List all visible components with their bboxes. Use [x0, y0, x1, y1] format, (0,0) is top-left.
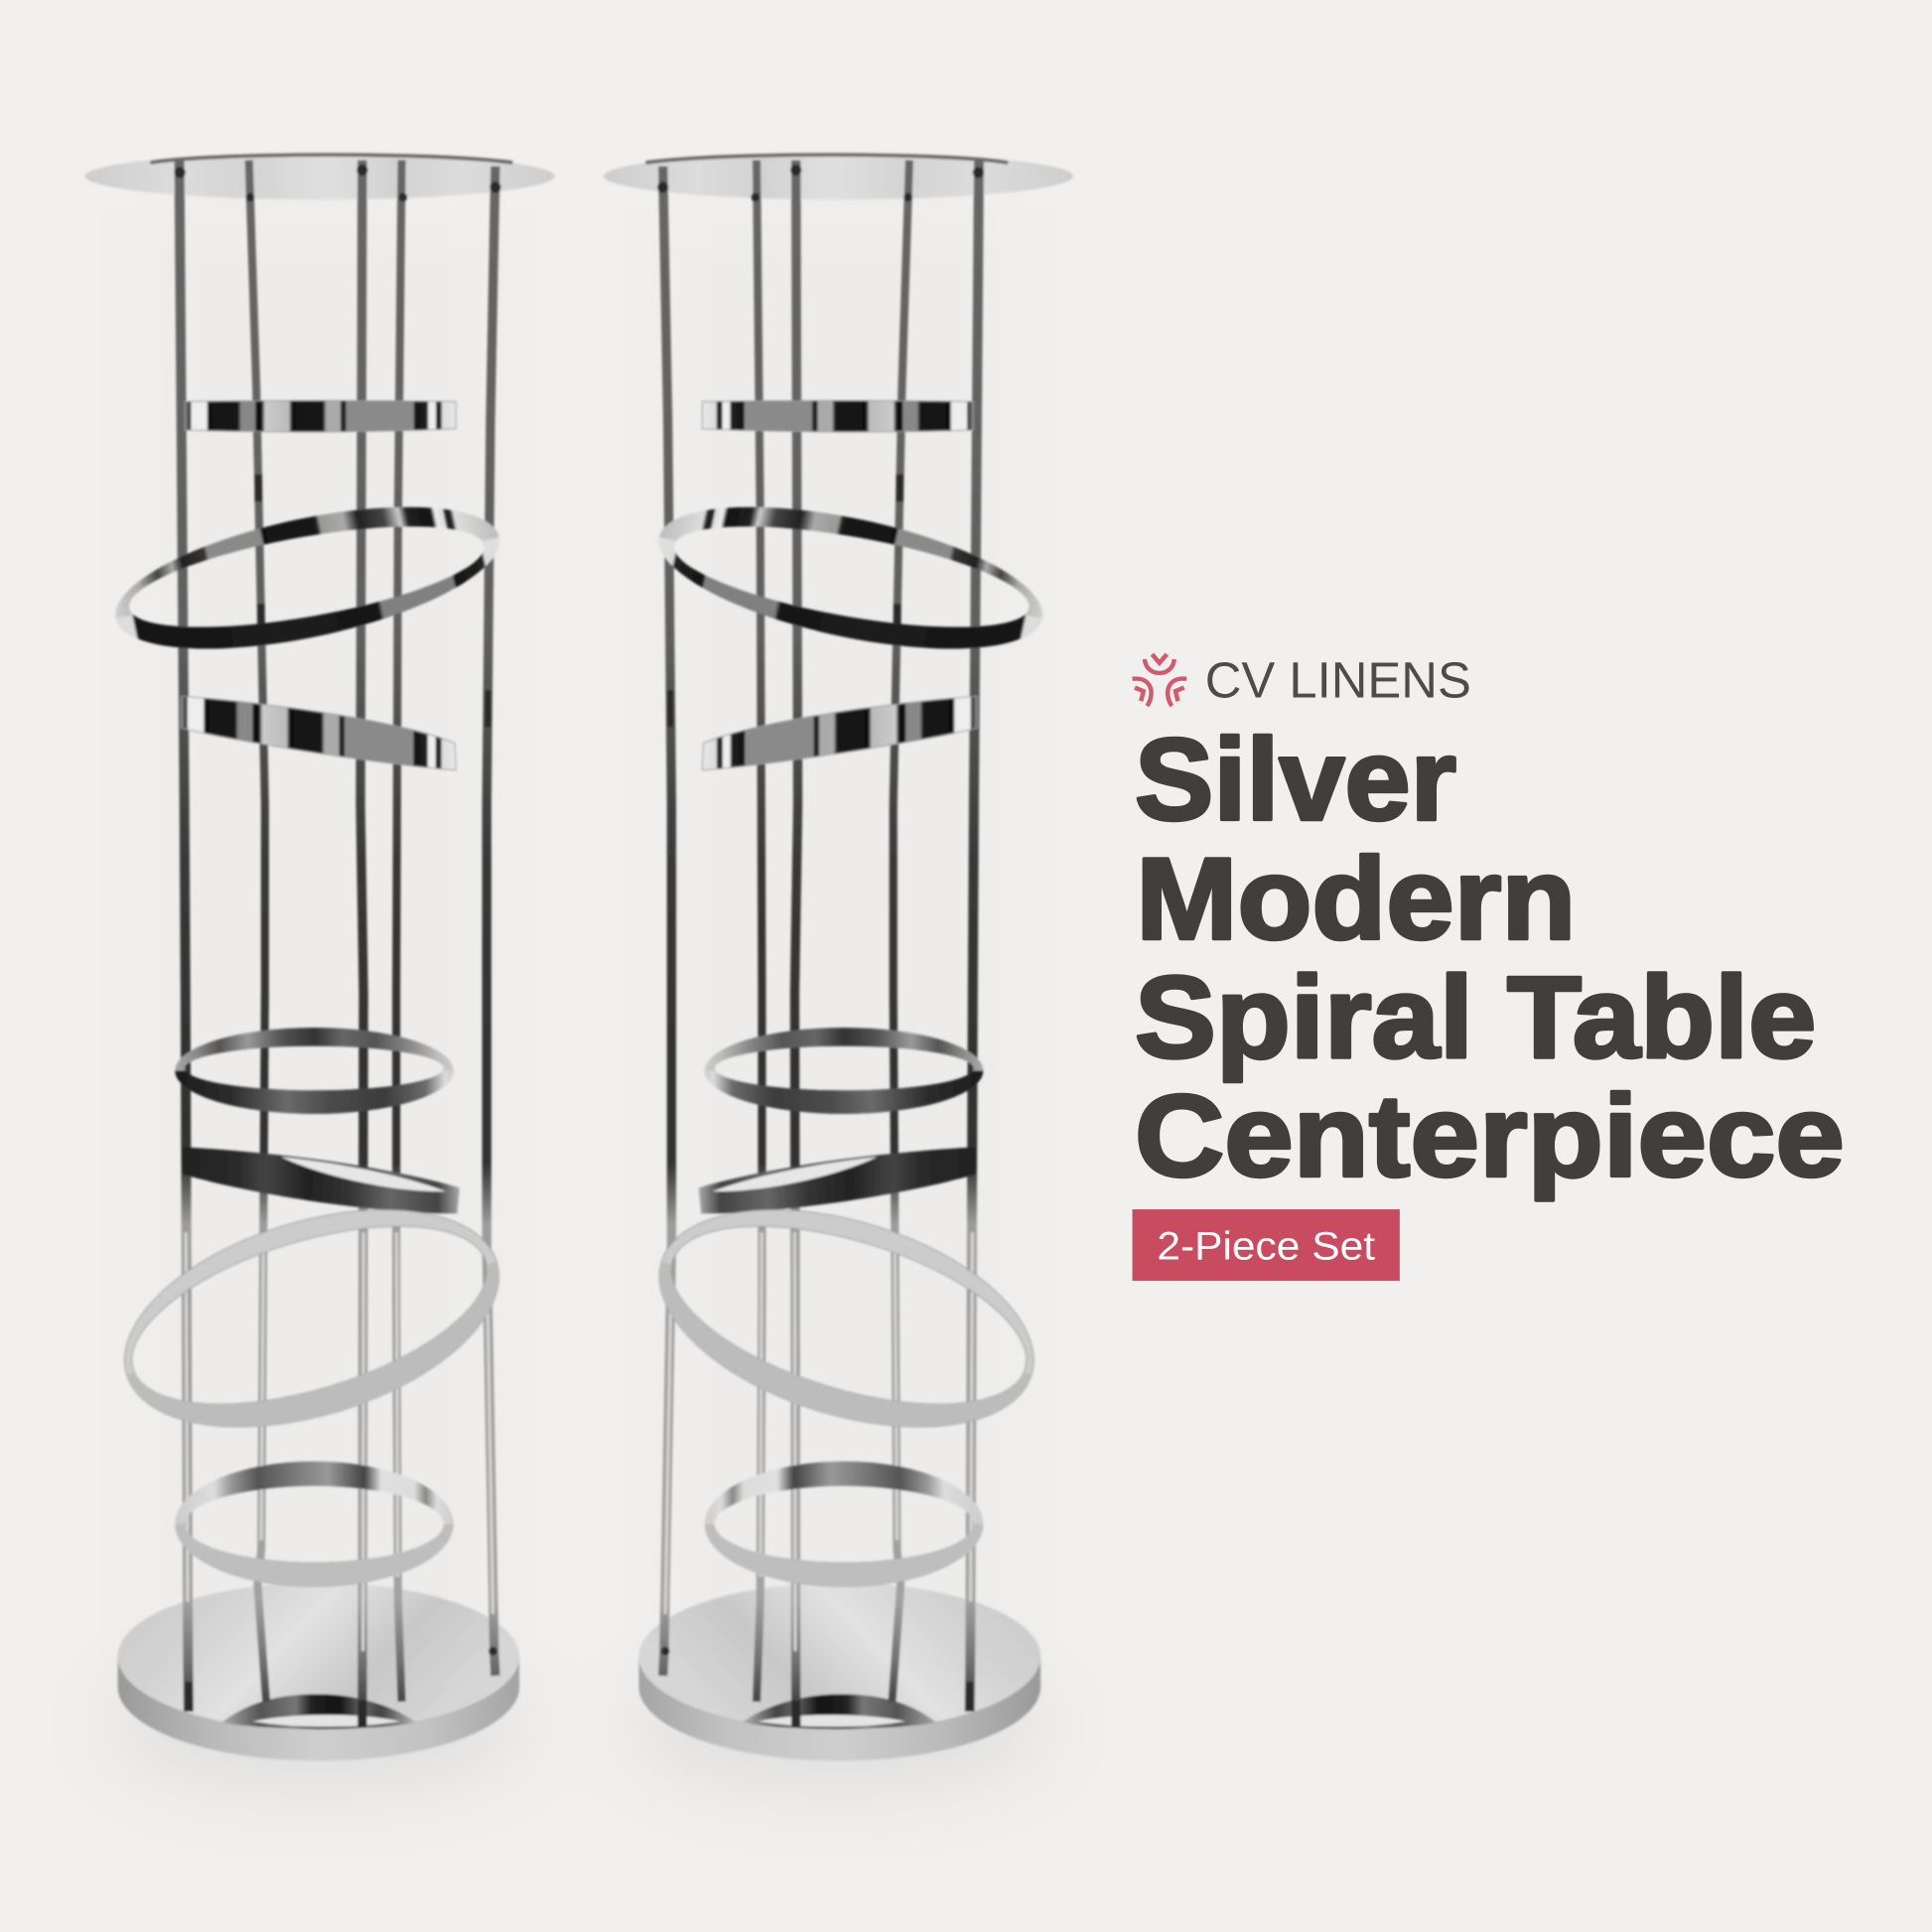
- rod joints: [175, 165, 500, 1727]
- badge: 2-piece set: [1133, 1209, 1400, 1281]
- title: Centerpiece: [1135, 1071, 1845, 1201]
- title: Modern: [1136, 834, 1576, 964]
- product: right spiral centerpiece stand (mirrored): [604, 153, 1073, 1760]
- ring band: dark tilted lens: [183, 1147, 460, 1213]
- ring: dark small: [175, 1028, 454, 1114]
- ring: lower large tilted light: [98, 1170, 525, 1467]
- product: left spiral centerpiece stand: [85, 153, 554, 1760]
- title: Spiral Table: [1135, 952, 1816, 1082]
- soft shadows behind the pillars: [108, 209, 1048, 1787]
- vertical rods: [180, 160, 495, 1727]
- round base plate: [118, 1583, 519, 1760]
- icon: CV Linens mark: [1133, 654, 1186, 706]
- brand name: CV LINENS: [1205, 651, 1471, 708]
- ring band: striped tilted: [181, 696, 456, 770]
- title: Silver: [1135, 714, 1456, 844]
- ring band: upper flat: [185, 401, 456, 432]
- rod highlights: [186, 1232, 492, 1651]
- badge: 2-piece set: 2-Piece Set: [1157, 1224, 1375, 1268]
- title: [1135, 714, 1845, 1201]
- ring: upper large tilted: [103, 480, 511, 676]
- logo: CV Linens: [1133, 651, 1471, 708]
- ring: lower small: [175, 1461, 454, 1587]
- top plate: [85, 153, 554, 200]
